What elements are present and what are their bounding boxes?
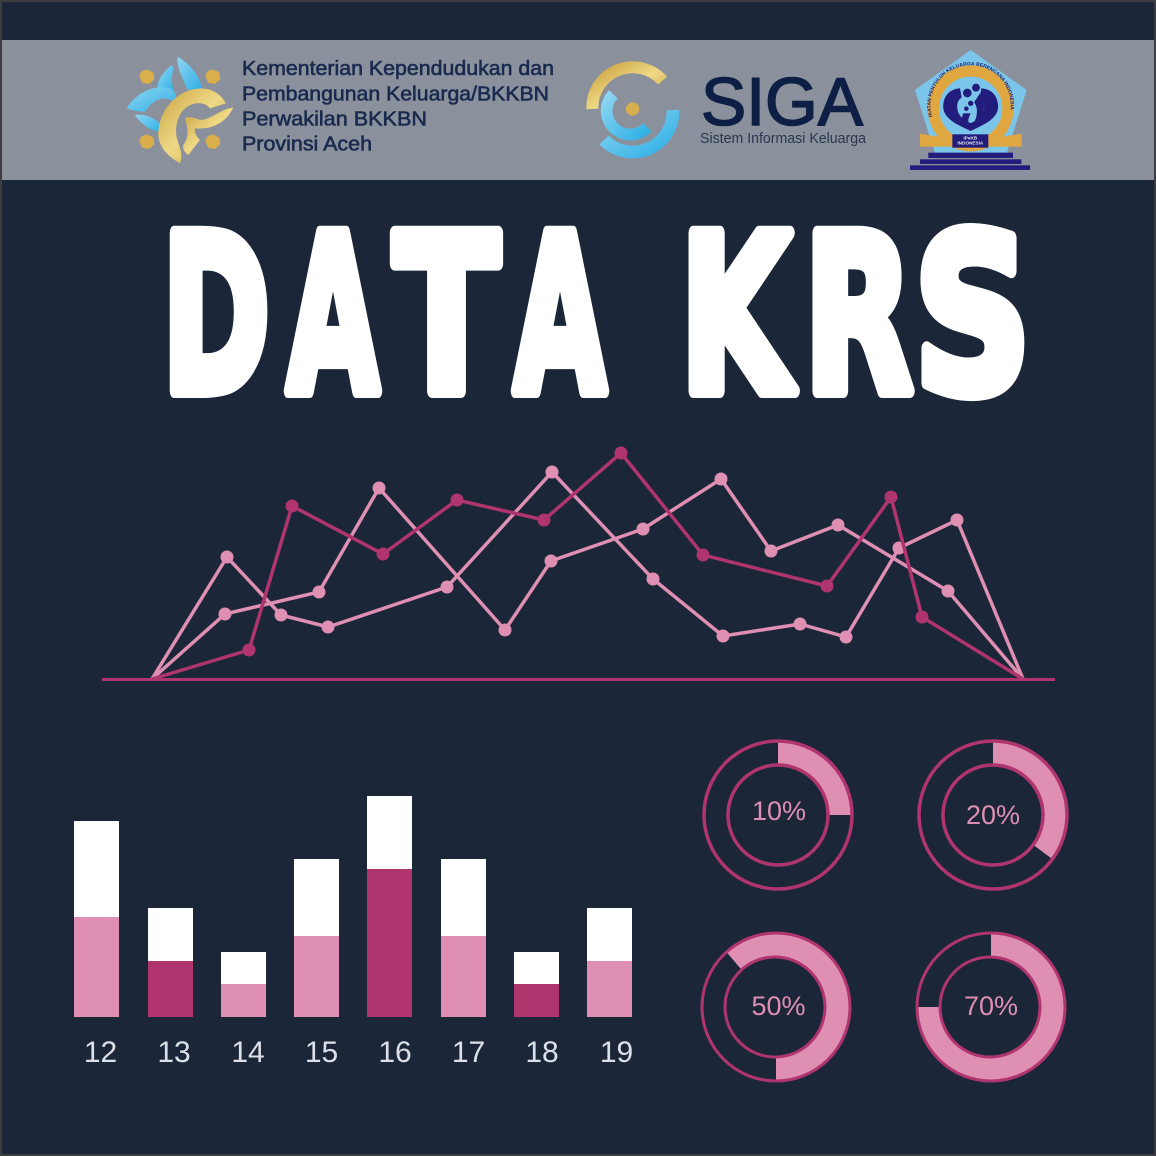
logo: Kementerian — [127, 57, 233, 163]
logo: SIGA mark — [592, 67, 673, 152]
title: K — [680, 191, 796, 443]
series: dark line — [152, 446, 1023, 679]
bar 14 — [221, 952, 266, 1017]
chart baseline — [102, 678, 1055, 681]
bar axis labels — [84, 1036, 633, 1069]
bar axis labels: 16 — [378, 1036, 412, 1069]
bar axis labels: 17 — [452, 1036, 485, 1069]
bar 16 — [367, 796, 412, 1017]
SIGA wordmark: Sistem Informasi Keluarga — [700, 130, 867, 147]
bar 18 — [514, 952, 559, 1017]
series: light line B — [152, 472, 1023, 679]
title: A — [287, 191, 379, 443]
bar axis labels: 18 — [525, 1036, 559, 1069]
logo: IPeKB emblem: IPeKB — [963, 136, 978, 141]
donut: 50% — [702, 933, 850, 1081]
bar axis labels: 12 — [84, 1036, 117, 1069]
bar 17 — [441, 859, 486, 1017]
bar axis labels: 13 — [157, 1036, 191, 1069]
logo: IPeKB emblem: INDONESIA — [957, 140, 984, 145]
bar axis labels: 15 — [305, 1036, 338, 1069]
donut: 10% — [704, 741, 852, 889]
bar 15 — [294, 859, 339, 1017]
donut: 20% — [919, 741, 1067, 889]
ministry name text: Provinsi Aceh — [242, 132, 372, 156]
title: D — [162, 191, 270, 443]
ministry name text: Pembangunan Keluarga/BKKBN — [242, 82, 549, 106]
series: light line A — [152, 466, 1023, 679]
donut: 70%: 70% — [964, 991, 1018, 1021]
ministry name text: Perwakilan BKKBN — [242, 108, 427, 130]
donut: 10%: 10% — [752, 796, 806, 826]
donut: 50%: 50% — [751, 991, 806, 1021]
title: A — [514, 191, 606, 443]
SIGA wordmark: SIGA — [701, 64, 864, 140]
bar 12 — [74, 821, 119, 1017]
line chart — [102, 446, 1055, 680]
ministry name text: Kementerian Kependudukan dan — [242, 57, 554, 80]
logo: IPeKB emblem: IKATAN PENYULUH KELUARGA BERENCANA INDONESIA — [927, 62, 1014, 118]
bar chart — [74, 796, 633, 1069]
donut: 70% — [917, 933, 1065, 1081]
logo: IPeKB emblem — [910, 50, 1030, 170]
bar 13 — [148, 908, 193, 1017]
title: R — [804, 191, 913, 443]
header band — [2, 40, 1154, 180]
bar 19 — [587, 908, 632, 1017]
ministry name text — [242, 57, 554, 156]
donut: 20%: 20% — [966, 800, 1020, 830]
bar axis labels: 19 — [600, 1036, 633, 1069]
bar axis labels: 14 — [231, 1036, 265, 1069]
title: S — [914, 191, 1031, 443]
title: T — [394, 191, 499, 443]
